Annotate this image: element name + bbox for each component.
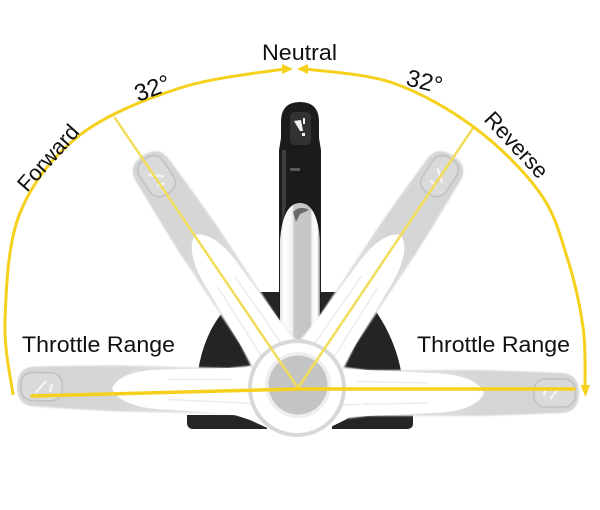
label: neutral: Neutral: [262, 40, 337, 65]
reverse throttle ghost lever: [328, 365, 579, 421]
black base housing: [187, 292, 413, 429]
forward throttle ghost lever: [16, 358, 269, 420]
label: reverse: Reverse: [479, 106, 553, 183]
chrome fillets: [232, 350, 365, 436]
icon: lever button: [290, 112, 311, 145]
reverse 32 degree ghost lever: [291, 140, 476, 380]
forward arc with arrow: [5, 64, 293, 395]
label: reverse 32 degrees: 32°: [404, 65, 445, 100]
label: left throttle range: Throttle Range: [22, 332, 175, 357]
label: forward: Forward: [12, 119, 84, 196]
hub: [250, 341, 344, 435]
forward 32 degree ghost lever: [120, 140, 305, 380]
label: right throttle range: Throttle Range: [417, 332, 570, 357]
neutral lever: [279, 102, 321, 345]
label: forward 32 degrees: 32°: [131, 70, 174, 108]
reverse arc with arrows: [297, 64, 590, 397]
chrome grip: [280, 203, 320, 345]
yellow angle lines: [32, 118, 574, 396]
